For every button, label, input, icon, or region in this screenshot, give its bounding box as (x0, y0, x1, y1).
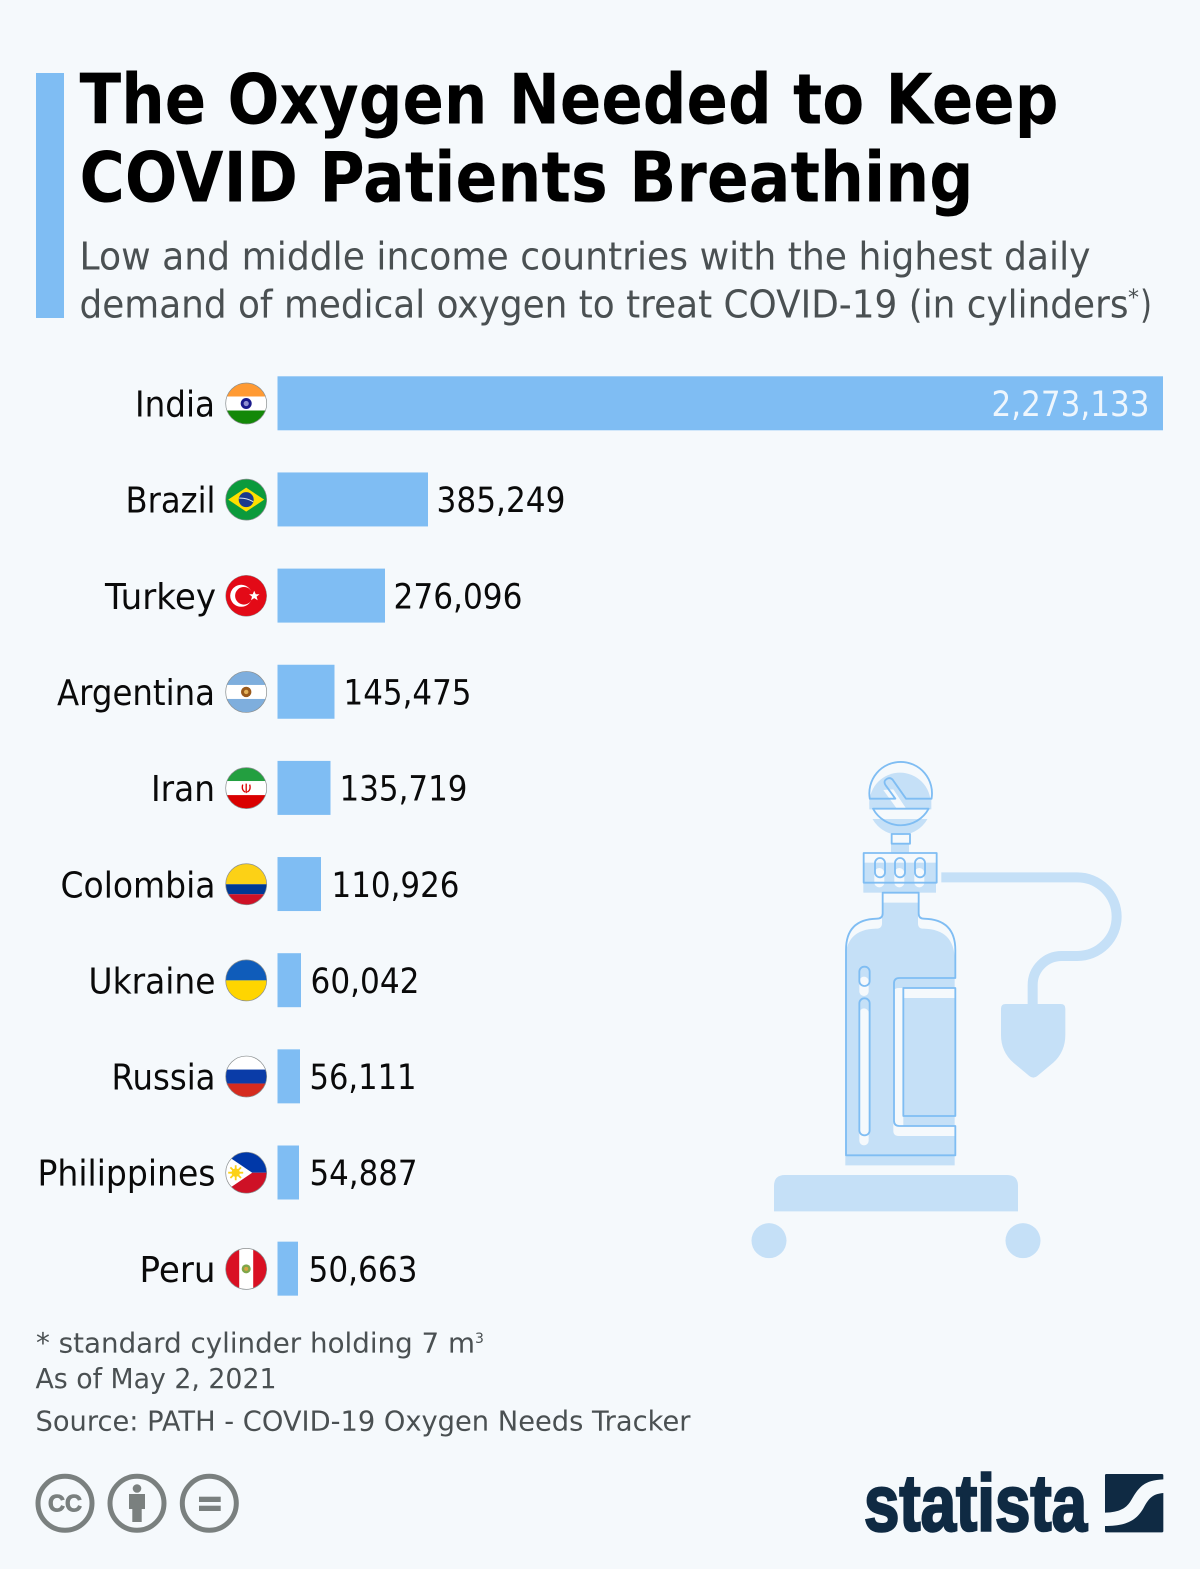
row: Philippines: 54,887 (310, 1154, 418, 1194)
row: Ukraine: Ukraine (88, 961, 216, 1002)
accent bar (36, 73, 64, 318)
footnotes and source: 3 (475, 1331, 484, 1347)
row: Argentina (57, 665, 472, 719)
row: India: 2,273,133 (992, 385, 1150, 425)
title: COVID Patients Breathing (80, 138, 974, 218)
row: Russia (112, 1049, 416, 1103)
footnotes and source (36, 1326, 691, 1438)
row: Brazil: 385,249 (436, 481, 566, 521)
outlines (846, 762, 955, 1155)
title (80, 60, 1058, 218)
subtitle (80, 234, 1152, 328)
row: Argentina: Argentina (57, 673, 215, 714)
row: Turkey: 276,096 (394, 577, 522, 617)
row: Turkey: Turkey (104, 577, 216, 618)
wheels (751, 1223, 1040, 1258)
icon: no derivatives (182, 1476, 236, 1530)
row: Iran: 135,719 (340, 770, 468, 810)
row: Colombia: 110,926 (332, 866, 460, 906)
bar chart (38, 376, 1163, 1296)
footnotes and source: * standard cylinder holding 7 m (36, 1326, 475, 1360)
footnotes and source: As of May 2, 2021 (36, 1362, 276, 1395)
row: Iran (151, 761, 468, 815)
cylinder fill (845, 903, 955, 1165)
row: Peru: 50,663 (308, 1250, 418, 1290)
row: Philippines: Philippines (38, 1154, 216, 1195)
row: Brazil: Brazil (126, 481, 216, 522)
row: Colombia (60, 857, 460, 911)
valve block fill (863, 863, 936, 893)
subtitle: demand of medical oxygen to treat COVID-19 (in cylinders (80, 282, 1128, 328)
row: Russia: 56,111 (310, 1058, 416, 1098)
footnotes and source: Source: PATH - COVID-19 Oxygen Needs Tracker (36, 1404, 691, 1438)
row: Ukraine: 60,042 (310, 962, 420, 1002)
icon: creative commons: CC (48, 1490, 82, 1518)
trolley base (774, 1175, 1018, 1211)
gauge fill (868, 772, 932, 853)
illustration: oxygen cylinder on trolley (751, 762, 1117, 1258)
title: The Oxygen Needed to Keep (80, 60, 1058, 140)
mask (1001, 1004, 1065, 1078)
row: India: India (135, 384, 215, 426)
row: Brazil (126, 472, 566, 526)
row: Argentina: 145,475 (344, 673, 472, 713)
row: Peru: Peru (140, 1250, 216, 1291)
subtitle: ) (1140, 282, 1152, 328)
subtitle: Low and middle income countries with the highest daily (80, 234, 1090, 280)
row: Turkey (104, 569, 523, 623)
row: Philippines (38, 1146, 418, 1200)
row: India (135, 376, 1163, 430)
row: Iran: Iran (151, 769, 215, 810)
icon: attribution (110, 1476, 164, 1530)
subtitle: * (1128, 286, 1139, 311)
hose (941, 877, 1117, 1008)
icon: statista logo mark (1105, 1474, 1163, 1532)
row: Russia: Russia (112, 1058, 216, 1099)
row: Ukraine (88, 953, 420, 1007)
row: Peru (140, 1242, 418, 1296)
row: Colombia: Colombia (60, 865, 216, 906)
statista wordmark: statista (864, 1458, 1087, 1548)
icon: creative commons (38, 1476, 92, 1530)
